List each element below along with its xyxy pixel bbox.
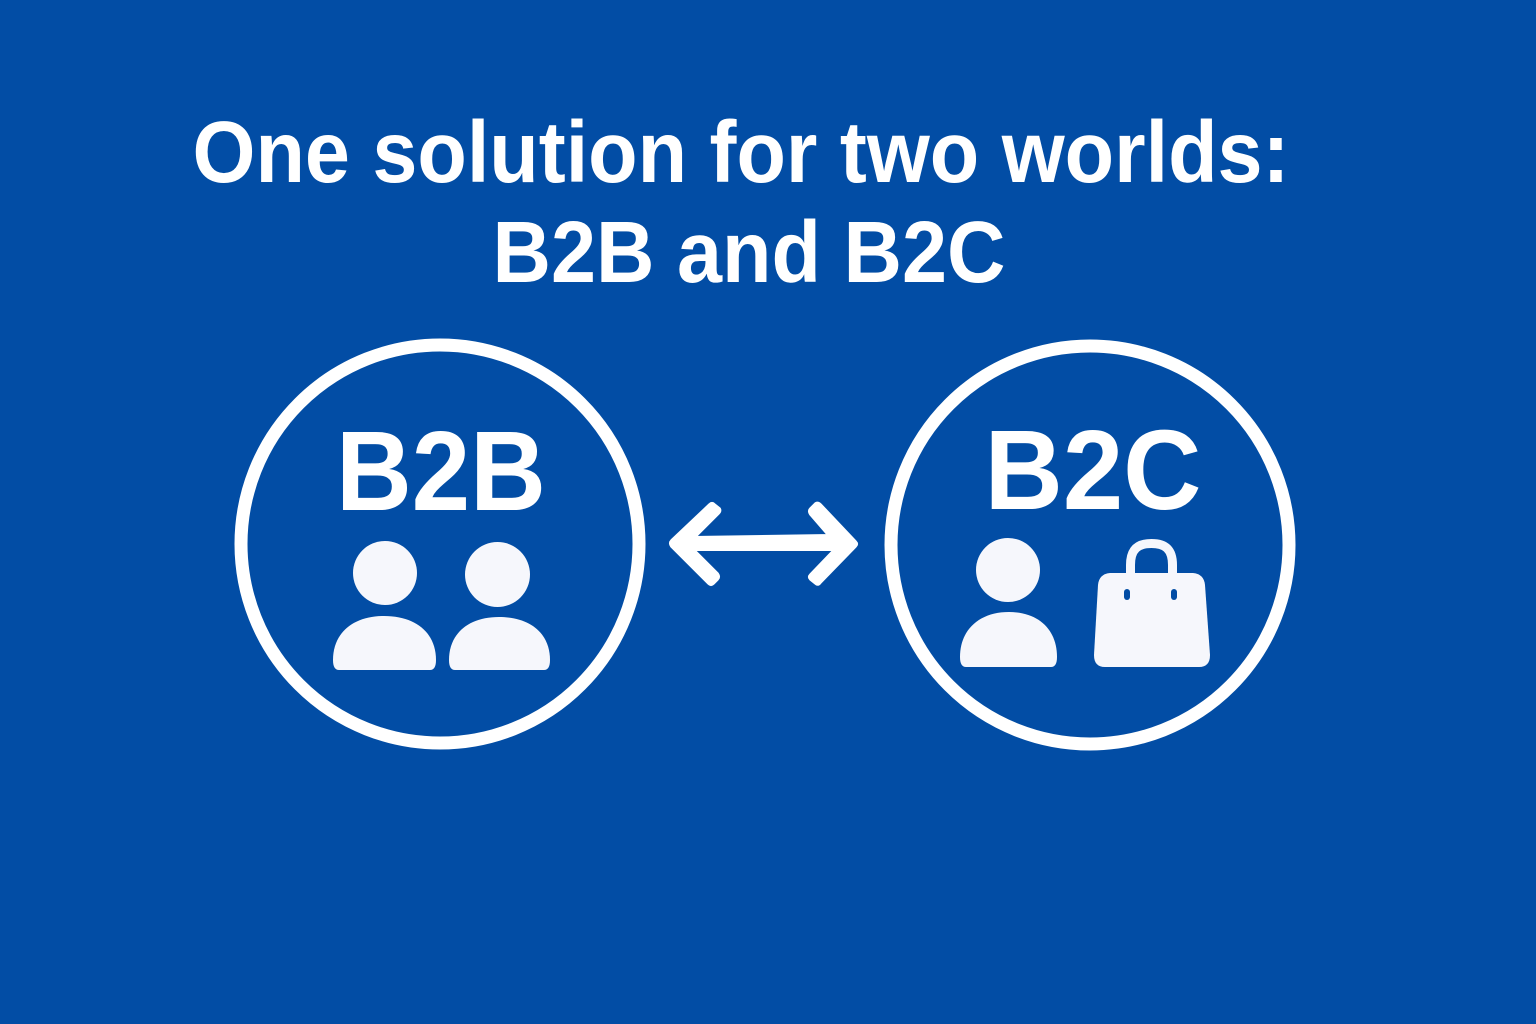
title: B2B and B2C [492, 204, 1006, 301]
B2C label: B2C [984, 407, 1202, 533]
title: One solution for two worlds: [192, 104, 1290, 201]
panel: B2B circle [241, 345, 639, 743]
icon: person [960, 538, 1057, 667]
icon: shopping bag [1094, 544, 1210, 667]
icon: two people [333, 541, 550, 670]
panel: B2C circle [891, 346, 1289, 744]
B2B label: B2B [336, 408, 546, 534]
arrow: bidirectional [671, 504, 856, 584]
title [192, 104, 1290, 301]
